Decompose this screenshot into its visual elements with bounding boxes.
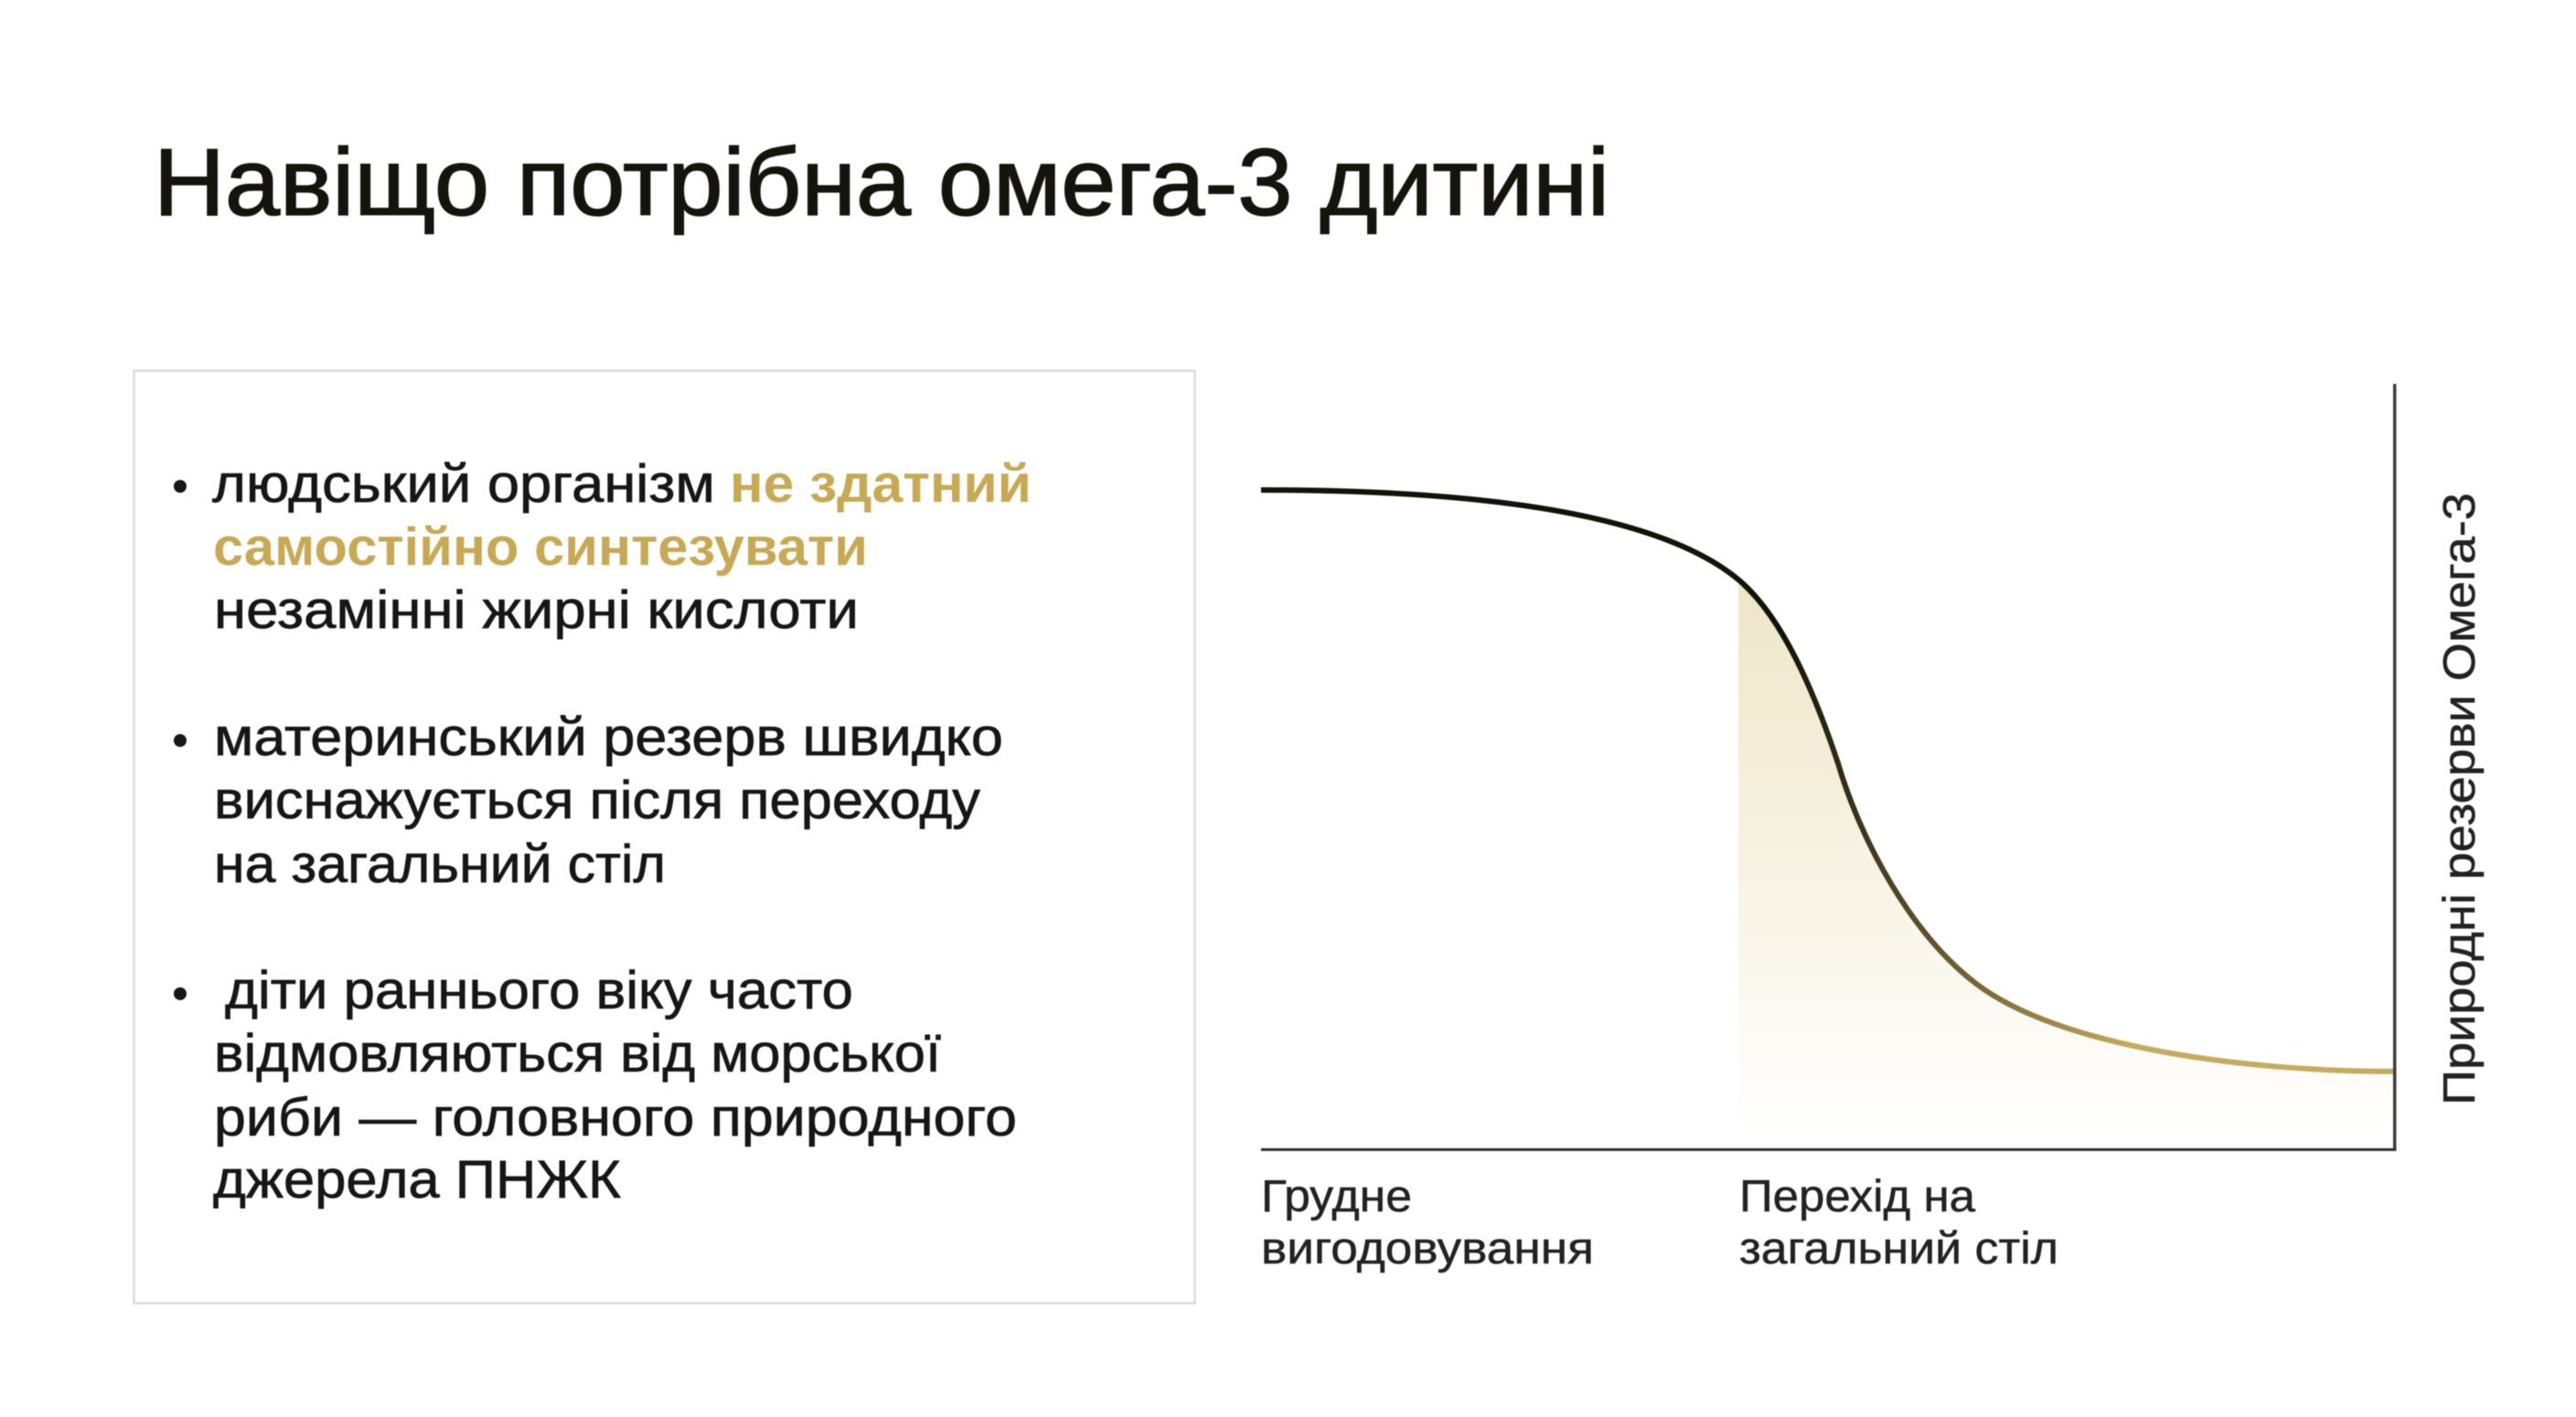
axis label: transition to general diet xyxy=(1739,1172,2058,1273)
bullet 3: children refuse fish: джерела ПНЖК xyxy=(213,1150,621,1209)
bullet 3: children refuse fish: риби — головного природного xyxy=(214,1088,1017,1147)
bullet 2: maternal reserve depleted xyxy=(174,708,1003,894)
reserves curve xyxy=(1261,490,2393,1071)
chart: omega-3 natural reserves decline xyxy=(1261,384,2485,1273)
shaded area under curve xyxy=(1738,580,2393,1129)
bullet 3: children refuse fish: відмовляються від морської xyxy=(214,1024,941,1083)
axis label: breastfeeding: Грудне xyxy=(1261,1172,1412,1221)
axis label: natural omega-3 reserves: Природні резерви Омега-3 xyxy=(2435,493,2485,1105)
bullet 1: body cannot synthesize: незамінні жирні кислоти xyxy=(214,581,859,640)
bullet 3: children refuse fish: діти раннього віку часто xyxy=(225,961,853,1020)
vertical axis xyxy=(2393,384,2396,1151)
axis label: breastfeeding: вигодовування xyxy=(1261,1224,1594,1273)
horizontal axis xyxy=(1261,1148,2396,1151)
axis label: breastfeeding xyxy=(1261,1172,1594,1273)
bullet 2: maternal reserve depleted: виснажується після переходу xyxy=(214,771,980,830)
bullet 1: body cannot synthesize: не здатний xyxy=(730,454,1031,514)
axis label: transition to general diet: Перехід на xyxy=(1739,1172,1976,1221)
panel: reasons list xyxy=(134,371,1194,1304)
bullet 2: maternal reserve depleted: материнський резерв швидко xyxy=(214,708,1003,767)
bullet 1: body cannot synthesize xyxy=(174,454,1031,640)
axis label: transition to general diet: загальний стіл xyxy=(1739,1224,2058,1273)
panel border xyxy=(134,371,1194,1304)
bullet 1: body cannot synthesize: людський організм xyxy=(212,454,715,514)
bullet 2: maternal reserve depleted: на загальний стіл xyxy=(214,835,666,894)
bullet 1: body cannot synthesize: самостійно синтезувати xyxy=(213,517,868,577)
bullet 3: children refuse fish xyxy=(174,961,1017,1209)
title: Навіщо потрібна омега-3 дитині xyxy=(154,130,1609,236)
